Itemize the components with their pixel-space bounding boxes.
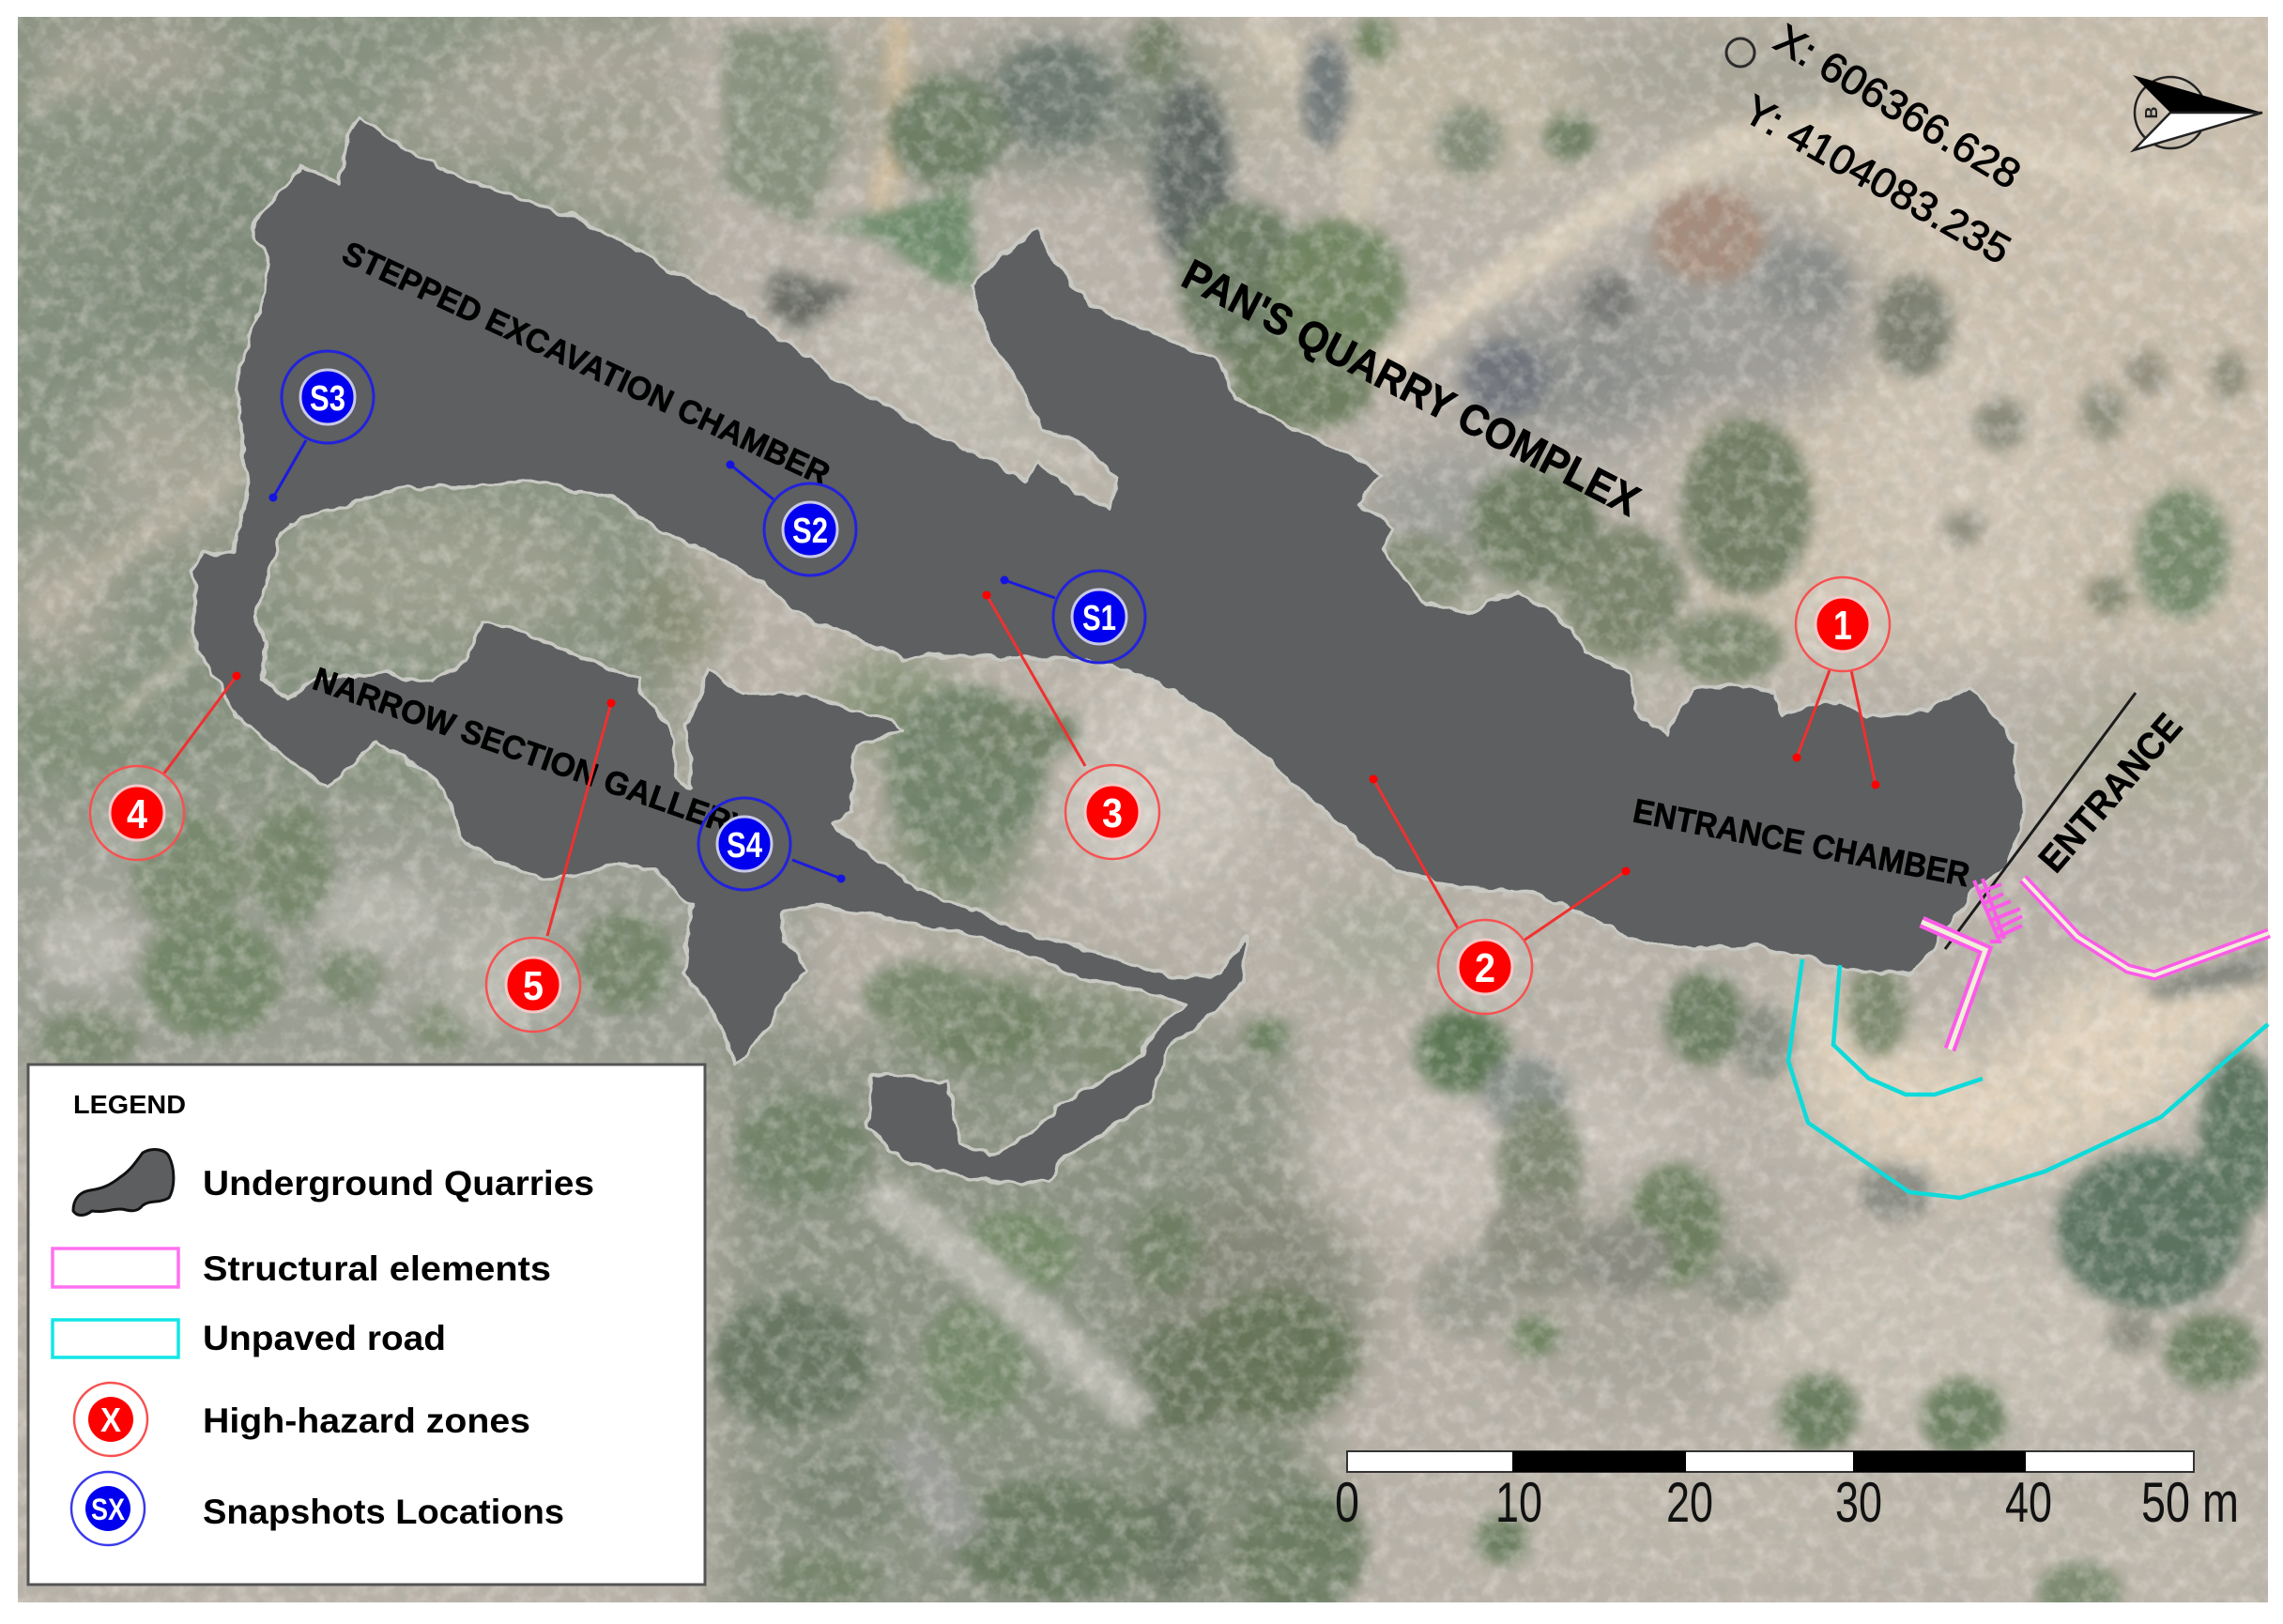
hazard zone 1 bbox=[1793, 577, 1890, 789]
structural elements bbox=[1922, 879, 2269, 1049]
snapshot S2 bbox=[727, 460, 856, 575]
legend icon: high-hazard zone bbox=[74, 1383, 147, 1456]
hazard zone 2 bbox=[1369, 775, 1630, 1014]
snapshot S3 bbox=[268, 351, 374, 501]
label: stepped excavation chamber: STEPPED EXCAVATION CHAMBER bbox=[337, 235, 835, 493]
coordinates text: Y: 4104083.235 bbox=[1736, 86, 2018, 273]
hazard zone 5 bbox=[486, 698, 616, 1032]
hazard zone 1: 1 bbox=[1833, 603, 1852, 649]
legend text: structural elements: Structural elements bbox=[203, 1249, 551, 1288]
coordinates text: X: 606366.628 bbox=[1767, 16, 2029, 198]
scale bar bbox=[1335, 1451, 2239, 1534]
legend panel bbox=[28, 1065, 705, 1585]
unpaved road bbox=[1788, 959, 2268, 1198]
snapshot S1 bbox=[1001, 571, 1145, 663]
entrance line bbox=[1945, 693, 2136, 949]
snapshot S4 bbox=[698, 798, 845, 890]
coordinates marker bbox=[1726, 38, 1754, 67]
legend icon: snapshot location bbox=[71, 1472, 145, 1545]
hazard zone 4: 4 bbox=[127, 791, 147, 837]
legend icon: quarry shape bbox=[73, 1150, 174, 1215]
hazard zone 3 bbox=[982, 591, 1159, 859]
icon: north arrow: B bbox=[2142, 107, 2161, 118]
legend icon: snapshot location: SX bbox=[91, 1493, 126, 1526]
legend text: underground quarries: Underground Quarries bbox=[203, 1164, 594, 1203]
scale bar: 50 m bbox=[2141, 1471, 2239, 1534]
scale bar: 0 bbox=[1335, 1471, 1359, 1534]
scale bar: 40 bbox=[2005, 1471, 2052, 1534]
legend title: LEGEND bbox=[73, 1090, 186, 1119]
legend text: unpaved road: Unpaved road bbox=[203, 1319, 446, 1357]
label: pan's quarry complex: PAN'S QUARRY COMPLEX bbox=[1174, 250, 1647, 526]
label: narrow section gallery: NARROW SECTION GALLERY bbox=[308, 661, 755, 848]
snapshot S2: S2 bbox=[792, 512, 828, 551]
legend text: high-hazard zones: High-hazard zones bbox=[203, 1402, 530, 1440]
snapshot S1: S1 bbox=[1082, 599, 1116, 638]
underground quarries outline bbox=[193, 116, 2026, 1182]
label: entrance chamber: ENTRANCE CHAMBER bbox=[1630, 791, 1973, 894]
legend icon: high-hazard zone: X bbox=[100, 1401, 121, 1439]
coordinates text bbox=[1736, 16, 2029, 273]
snapshot S3: S3 bbox=[310, 379, 345, 419]
scale bar: 20 bbox=[1666, 1471, 1713, 1534]
legend swatch: unpaved road bbox=[53, 1320, 178, 1357]
label: entrance: ENTRANCE bbox=[2031, 706, 2190, 881]
snapshot S4: S4 bbox=[727, 826, 762, 866]
icon: north arrow bbox=[2133, 75, 2262, 150]
hazard zone 5: 5 bbox=[523, 963, 544, 1009]
legend swatch: structural elements bbox=[53, 1249, 178, 1287]
legend text: snapshots locations: Snapshots Locations bbox=[203, 1493, 564, 1531]
scale bar: 10 bbox=[1495, 1471, 1542, 1534]
hazard zone 2: 2 bbox=[1475, 945, 1495, 991]
hazard zone 3: 3 bbox=[1102, 790, 1123, 836]
hazard zone 4 bbox=[90, 672, 240, 860]
scale bar: 30 bbox=[1835, 1471, 1882, 1534]
